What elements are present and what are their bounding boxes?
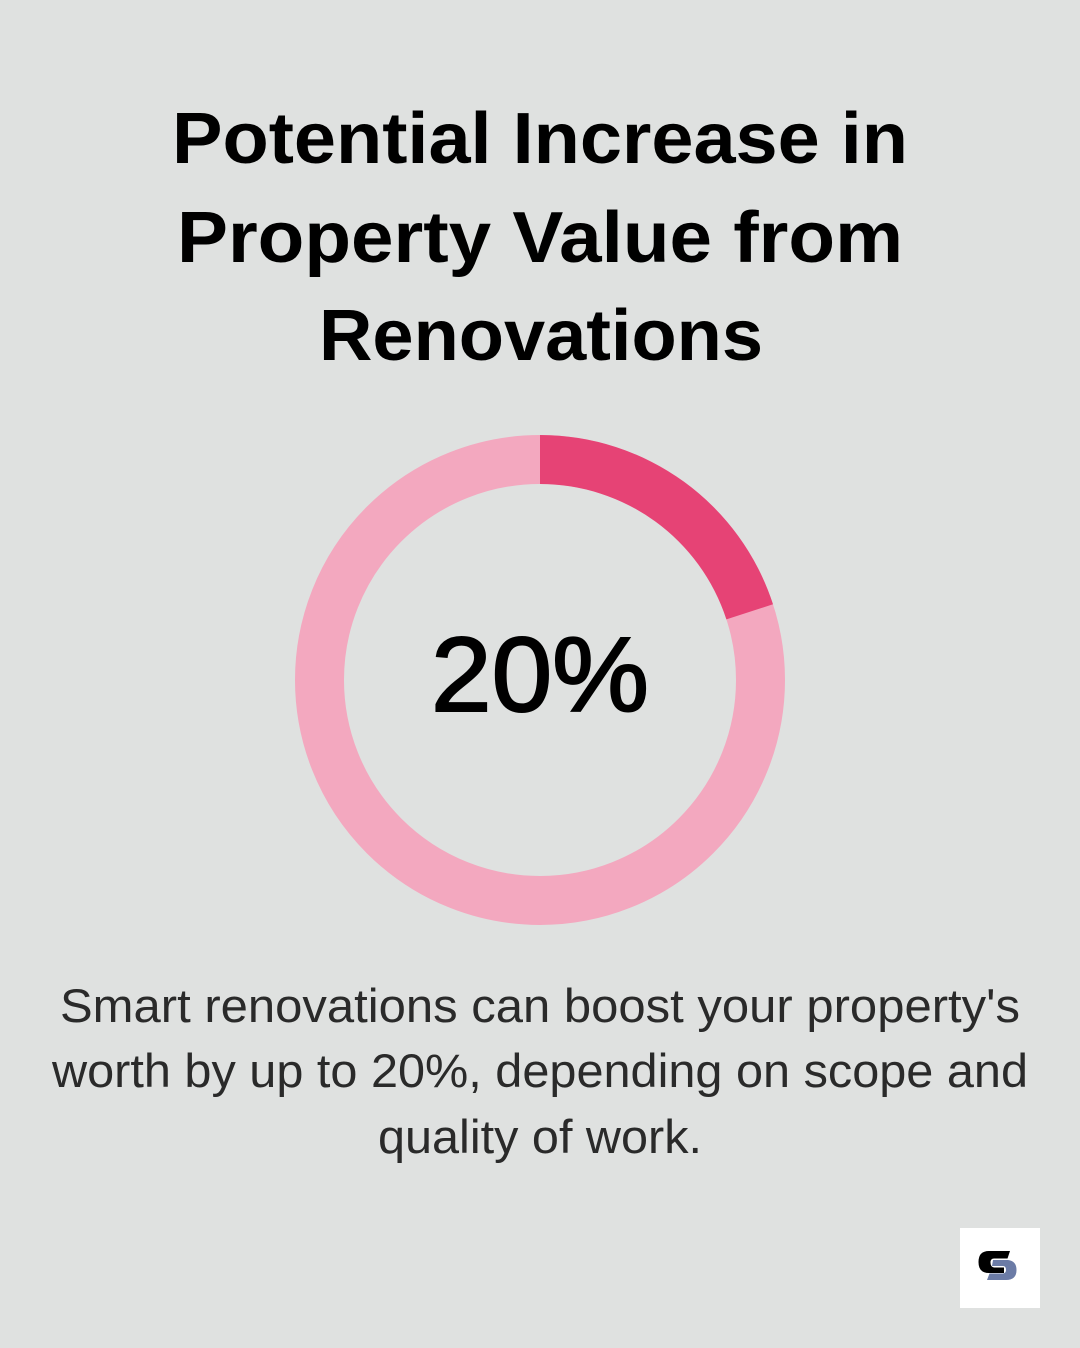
description text	[51, 979, 1028, 1163]
title: Potential Increase in	[172, 99, 908, 179]
donut chart: 20%	[320, 435, 773, 900]
logo mark: blue part	[987, 1260, 1016, 1280]
description text: worth by up to 20%, depending on scope and	[51, 1044, 1028, 1097]
description text: quality of work.	[378, 1110, 702, 1163]
logo mark: black part	[978, 1251, 1010, 1273]
center value: 20%	[431, 616, 649, 734]
title	[172, 99, 908, 376]
ring track	[320, 460, 760, 900]
title: Property Value from	[177, 198, 903, 278]
description text: Smart renovations can boost your property's	[60, 979, 1020, 1032]
title: Renovations	[319, 296, 763, 376]
logo badge	[960, 1228, 1040, 1308]
ring highlighted segment	[540, 435, 773, 619]
